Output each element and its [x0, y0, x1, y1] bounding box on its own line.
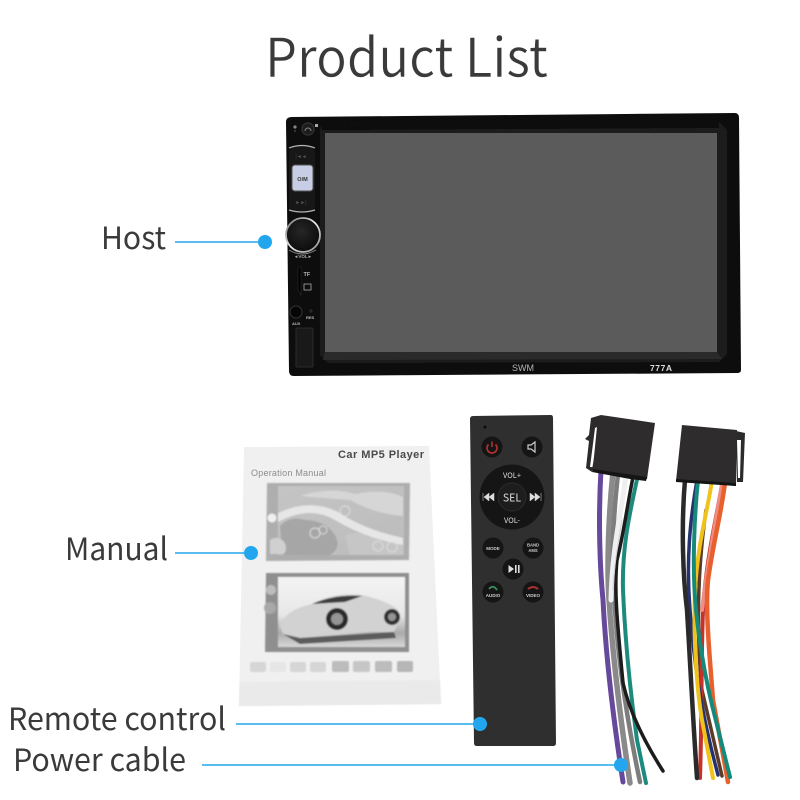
screen bezel: [320, 122, 727, 363]
title: Product List: [265, 14, 548, 93]
audio button: AUDIO: [486, 593, 501, 598]
callout: power cable: [13, 735, 628, 780]
callout: remote control: [8, 694, 487, 739]
manual picture: sports car unit: [264, 573, 409, 652]
side button cluster: O/M: [297, 177, 308, 183]
callout: remote control: Remote control: [8, 694, 226, 739]
left wiring harness: [585, 415, 663, 783]
side button cluster: ►►|: [295, 199, 307, 206]
left harness wires: [600, 470, 663, 783]
SWM brand label: SWM: [512, 363, 534, 373]
right plug: [676, 425, 737, 486]
play pause button: [502, 558, 524, 580]
manual feature badges: [250, 661, 413, 672]
left plug: [592, 415, 655, 479]
left plug tab: [585, 415, 601, 472]
side button cluster: |◄◄: [295, 153, 307, 160]
TF card slot: TF: [304, 272, 311, 278]
host head unit: [286, 113, 741, 376]
AUX jack and reset: [290, 306, 315, 326]
right wiring harness: [676, 425, 745, 782]
manual booklet: [239, 446, 441, 706]
right plug slot: [737, 440, 741, 478]
right plug tab: [736, 431, 745, 482]
side button cluster: [289, 146, 315, 212]
directional pad: VOL+: [503, 470, 521, 481]
volume knob: ◄VOL►: [294, 254, 312, 259]
video button: VIDEO: [526, 593, 540, 598]
manual subheading: Operation Manual: [251, 468, 326, 478]
band button: [522, 538, 544, 558]
mute button: [522, 436, 542, 458]
headphone jack and mic: [293, 123, 318, 135]
AUX jack and reset: AUX: [292, 321, 301, 326]
power button: [482, 436, 502, 458]
mode button: [482, 538, 504, 558]
directional pad: [480, 464, 544, 530]
remote body: [470, 415, 556, 746]
right harness wires: [683, 480, 730, 782]
audio button: [482, 582, 504, 602]
callout: host: Host: [101, 213, 166, 258]
callout: host: [101, 213, 272, 258]
host body: [286, 113, 741, 376]
callout: manual: [65, 524, 258, 569]
callout: manual: Manual: [65, 524, 168, 569]
band button: BAND: [527, 542, 539, 548]
model label: 777A: [650, 363, 672, 373]
remote control: [470, 415, 556, 746]
callout: power cable: Power cable: [13, 735, 186, 780]
USB cover: [296, 328, 313, 367]
mode button: MODE: [486, 546, 500, 551]
left plug slot: [590, 427, 597, 467]
directional pad: SEL: [503, 490, 521, 506]
TF card slot: [298, 267, 311, 295]
video button: [522, 582, 544, 602]
band button: AMS: [528, 548, 538, 553]
manual picture: world map unit: [266, 483, 410, 561]
AUX jack and reset: RES: [306, 315, 315, 320]
volume knob: [286, 218, 320, 259]
directional pad: VOL-: [504, 515, 520, 526]
manual heading: Car MP5 Player: [338, 449, 425, 461]
LED: [484, 426, 486, 428]
screen: [325, 133, 717, 352]
paper: [239, 446, 441, 706]
